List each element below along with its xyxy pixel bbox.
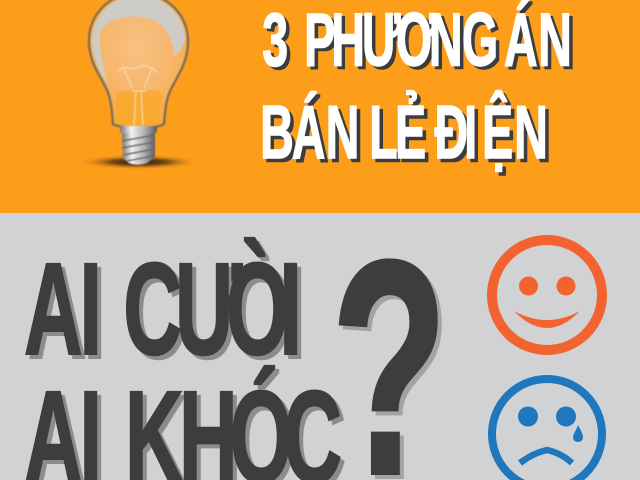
panel: gray lower section [0,213,640,480]
panel: orange header [0,0,640,213]
title: 3 PHƯƠNG ÁN: 3 PHƯƠNG ÁN [262,0,572,82]
icon: crying face [492,379,602,480]
title: BÁN LẺ ĐIỆN: BÁN LẺ ĐIỆN [264,93,551,179]
icon: light bulb [77,0,201,170]
icon: smiling face [492,240,602,350]
heading: AI CƯỜI: AI CƯỜI [28,240,306,387]
title: BÁN LẺ ĐIỆN: BÁN LẺ ĐIỆN [260,90,548,175]
heading: AI CƯỜI: AI CƯỜI [24,236,302,383]
title: 3 PHƯƠNG ÁN: 3 PHƯƠNG ÁN [266,1,575,86]
